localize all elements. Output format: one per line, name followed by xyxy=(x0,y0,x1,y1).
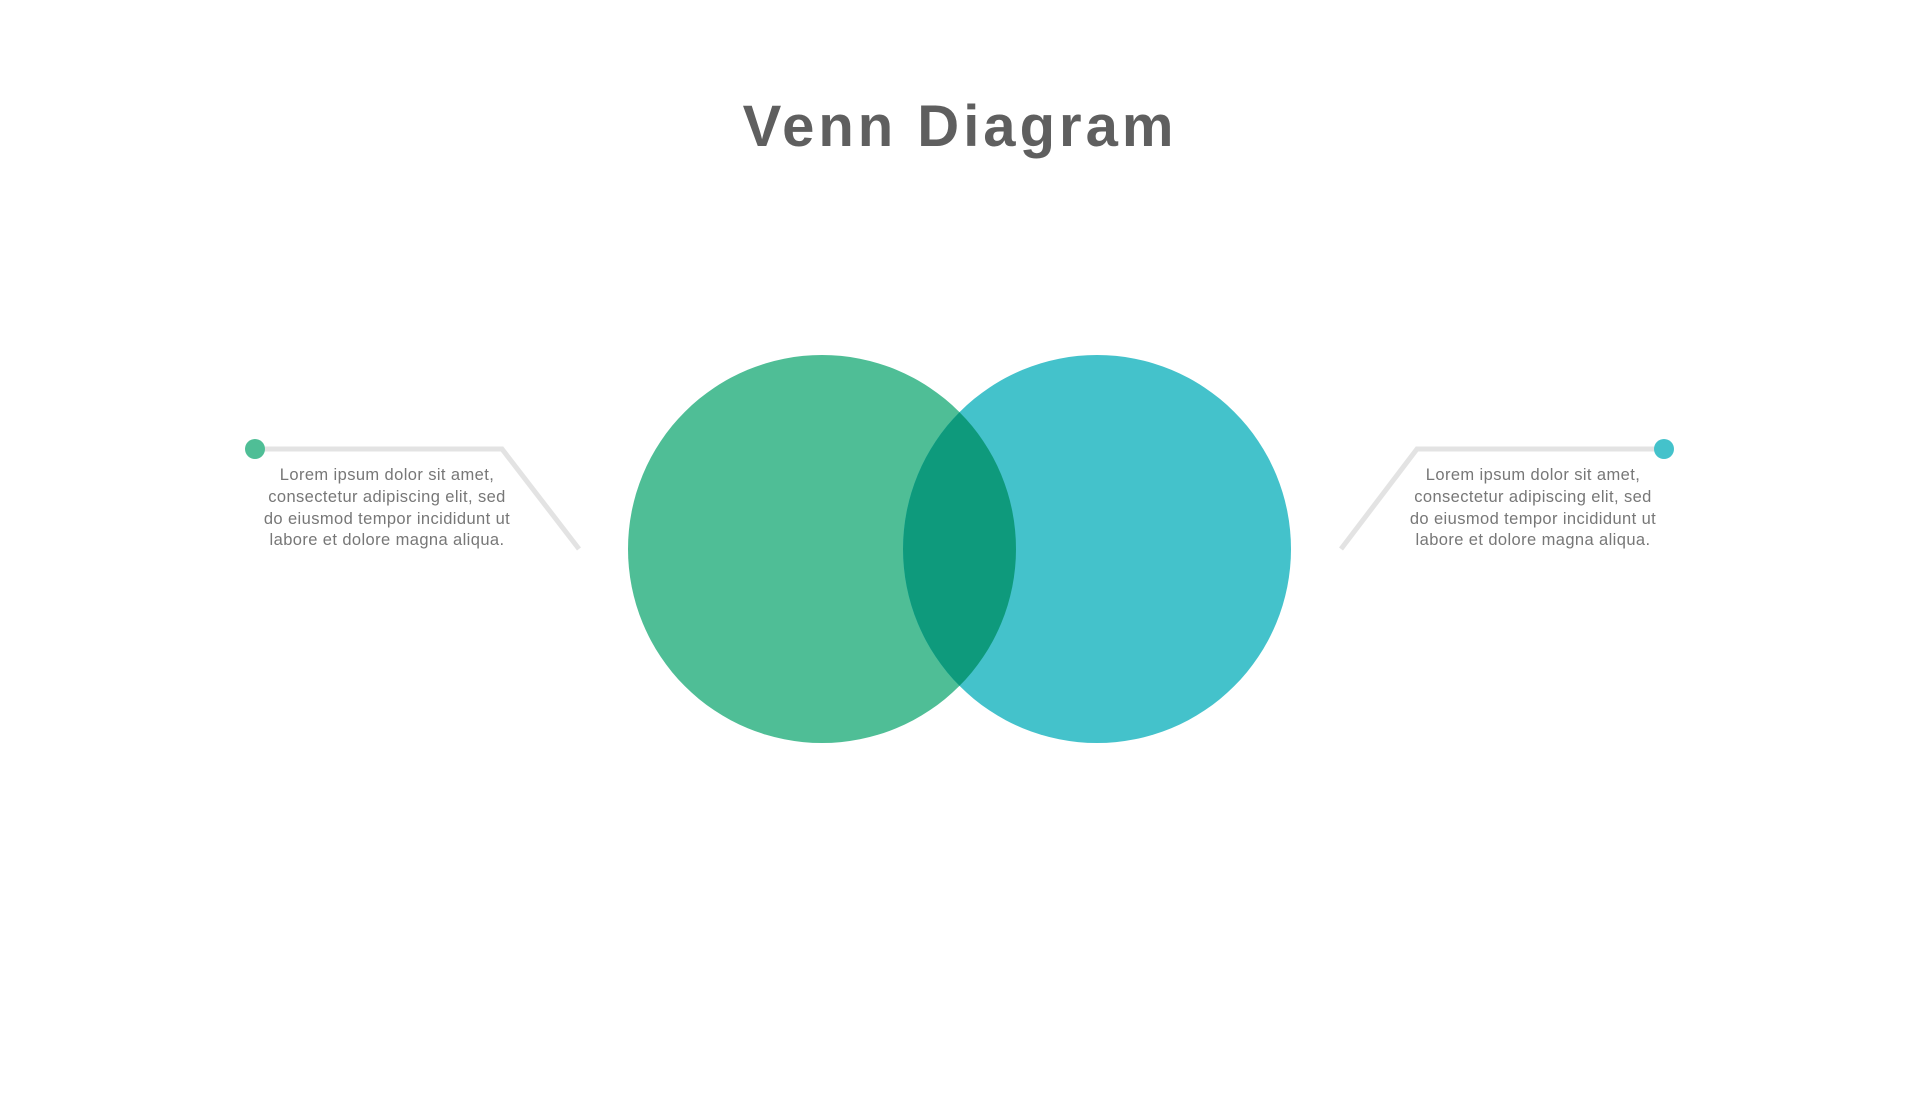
text block: left: consectetur adipiscing elit, sed xyxy=(268,488,506,506)
text block: left: do eiusmod tempor incididunt ut xyxy=(264,510,510,528)
circle: right xyxy=(903,355,1291,743)
text block: right: do eiusmod tempor incididunt ut xyxy=(1410,510,1656,528)
circle: left xyxy=(628,355,1016,743)
text block: left: labore et dolore magna aliqua. xyxy=(270,531,504,549)
right connector xyxy=(1341,439,1674,549)
text block: right xyxy=(1410,466,1656,549)
venn diagram xyxy=(245,355,1674,743)
text block: left xyxy=(264,466,510,549)
text block: right: Lorem ipsum dolor sit amet, xyxy=(1426,466,1640,484)
text block: right: labore et dolore magna aliqua. xyxy=(1416,531,1650,549)
text block: left: Lorem ipsum dolor sit amet, xyxy=(280,466,494,484)
text block: right: consectetur adipiscing elit, sed xyxy=(1414,488,1652,506)
title: Venn Diagram xyxy=(743,94,1177,159)
left connector xyxy=(245,439,579,549)
overlap xyxy=(903,412,1016,686)
